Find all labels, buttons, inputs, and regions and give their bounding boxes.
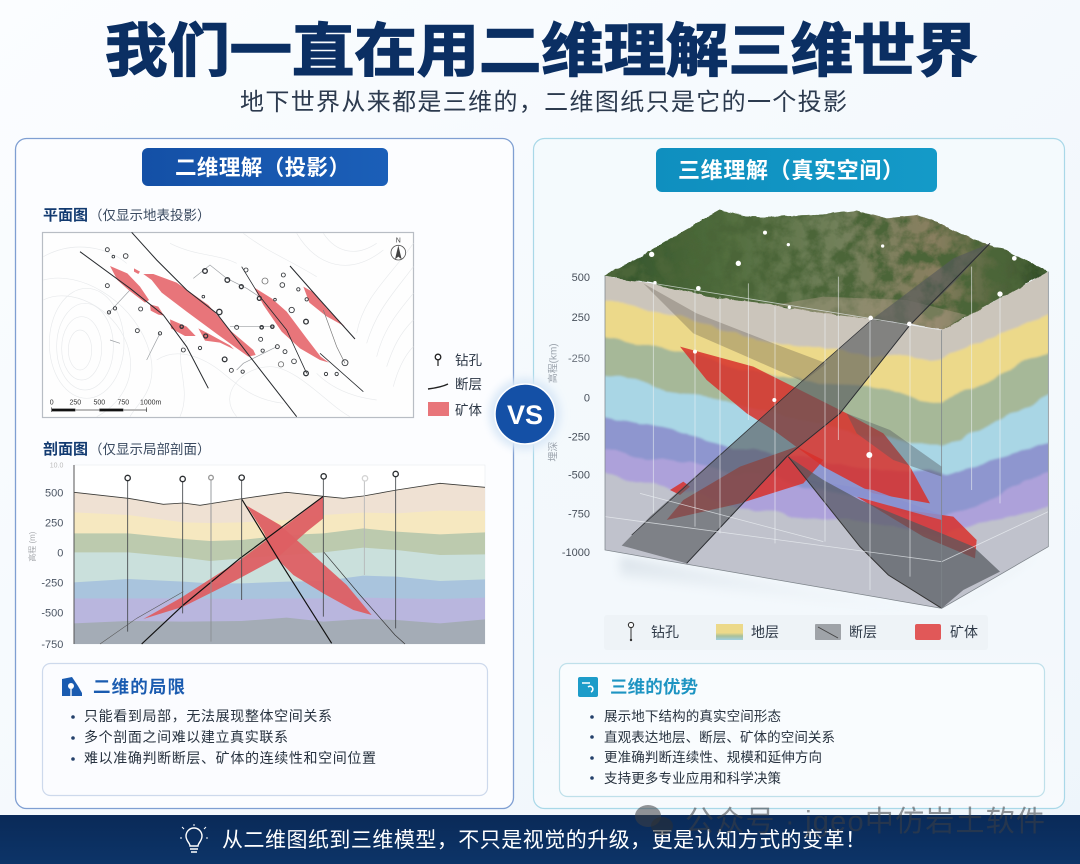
- 3D axis labels: -500: [568, 470, 590, 482]
- legend: strata: 地层: [751, 624, 779, 640]
- legend: drill hole: 钻孔: [455, 353, 482, 368]
- legend: fault: 断层: [849, 624, 877, 640]
- 3D axis labels: -250: [568, 353, 590, 365]
- banner message: 从二维图纸到三维模型，不只是视觉的升级，更是认知方式的变革！: [222, 829, 866, 852]
- title: 我们一直在用二维理解三维世界: [105, 18, 978, 84]
- faults: [80, 232, 363, 417]
- section axis: -500: [41, 608, 63, 620]
- limitations box: [42, 664, 488, 796]
- strata: [605, 272, 1048, 608]
- watermark: 公众号 · jgeo中仿岩土软件: [685, 805, 1045, 838]
- 3D axis labels: -1000: [562, 547, 590, 559]
- terrain surface: [605, 210, 1048, 330]
- floor shadow: [620, 553, 1040, 620]
- legend: ore: [915, 624, 978, 640]
- section axis: 0: [57, 547, 63, 559]
- 3D drill collars: [649, 231, 1017, 458]
- strata in front of ore: [807, 480, 942, 520]
- icon: chat bubbles: [635, 805, 673, 835]
- north arrow: N: [396, 238, 401, 245]
- limitations list: [71, 708, 376, 766]
- legend: fault: 断层: [455, 377, 482, 392]
- plan map heading: 平面图（仅显示地表投影）: [43, 207, 211, 224]
- 3D block model: [547, 210, 1060, 620]
- plan map legend: [428, 353, 482, 418]
- icon: 3D cube: [578, 677, 598, 697]
- drill holes: [105, 248, 348, 376]
- drill holes: [125, 471, 398, 642]
- section chart: [27, 463, 485, 651]
- limitations list: 只能看到局部，无法展现整体空间关系: [84, 708, 332, 724]
- section axis: -750: [41, 639, 63, 651]
- legend: strata: [716, 624, 779, 640]
- plan map: [42, 232, 414, 418]
- first fault plane: [622, 243, 990, 563]
- legend: fault: [815, 624, 877, 640]
- advantages list: 更准确判断连续性、规模和延伸方向: [604, 750, 822, 765]
- scale bar: 0: [50, 399, 54, 406]
- advantages list: 展示地下结构的真实空间形态: [604, 709, 781, 724]
- scale bar: 250: [70, 399, 81, 406]
- 3D legend: [604, 615, 988, 650]
- section axis: 高程 (m): [27, 531, 37, 562]
- heading pill: 2D: [142, 148, 388, 186]
- subtitle: 地下世界从来都是三维的，二维图纸只是它的一个投影: [240, 89, 847, 116]
- strata: [74, 483, 485, 644]
- heading pill: 2D: 二维理解（投影）: [175, 156, 350, 180]
- legend: ore body: 矿体: [455, 403, 482, 418]
- panel: 3D understanding: [534, 138, 1064, 808]
- advantages list: 直观表达地层、断层、矿体的空间关系: [604, 730, 835, 745]
- legend: ore: 矿体: [950, 624, 978, 640]
- plot area: [74, 465, 485, 644]
- 3D axis labels: -250: [568, 432, 590, 444]
- advantages list: [590, 709, 835, 786]
- 3D axis titles: [547, 343, 560, 462]
- 3D axis labels: 250: [572, 312, 590, 324]
- section axis: -250: [41, 577, 63, 589]
- faults: [100, 496, 405, 644]
- heading pill: 3D: [656, 148, 937, 192]
- 3D axis labels: 0: [584, 393, 590, 405]
- 3D axis titles: 高程(km): [547, 343, 560, 383]
- box edges and grid: [605, 267, 1048, 590]
- VS badge: VS: [507, 400, 543, 430]
- advantages box: [560, 664, 1044, 796]
- 3D axis labels: 500: [572, 272, 590, 284]
- ore bodies: [110, 266, 345, 363]
- scale bar: 750: [118, 399, 129, 406]
- advantages list: 支持更多专业应用和科学决策: [604, 770, 782, 786]
- limitations list: 多个剖面之间难以建立真实联系: [84, 729, 288, 745]
- borehole traces: [108, 265, 277, 370]
- advantages heading: 三维的优势: [610, 677, 698, 697]
- north arrow: [391, 238, 406, 260]
- legend: drill hole: 钻孔: [651, 624, 679, 640]
- heading pill: 3D: 三维理解（真实空间）: [678, 158, 904, 183]
- 3D axis labels: [562, 272, 590, 559]
- panel: 2D understanding: [16, 138, 514, 808]
- section axis: 500: [45, 487, 63, 499]
- section axis: 250: [45, 517, 63, 529]
- limitations list: 难以准确判断断层、矿体的连续性和空间位置: [84, 750, 376, 766]
- section axis: [27, 463, 74, 651]
- scale bar: [50, 399, 162, 412]
- second fault plane: [643, 283, 1000, 608]
- ore body: [667, 347, 977, 558]
- scale bar: 1000m: [140, 399, 162, 406]
- section axis: 10.0: [50, 463, 63, 470]
- 3D axis titles: 埋深: [548, 442, 560, 462]
- section heading: 剖面图（仅显示局部剖面）: [43, 440, 211, 458]
- legend: drill hole: [628, 622, 679, 641]
- icon: light bulb: [180, 824, 208, 852]
- VS badge: [489, 378, 561, 450]
- bottom banner: [0, 815, 1080, 864]
- scale bar: 500: [94, 399, 105, 406]
- contour lines: [43, 233, 413, 417]
- 3D axis labels: -750: [568, 508, 590, 520]
- icon: map with pin: [62, 677, 82, 696]
- limitations heading: 二维的局限: [93, 677, 186, 697]
- ore bodies: [143, 497, 372, 619]
